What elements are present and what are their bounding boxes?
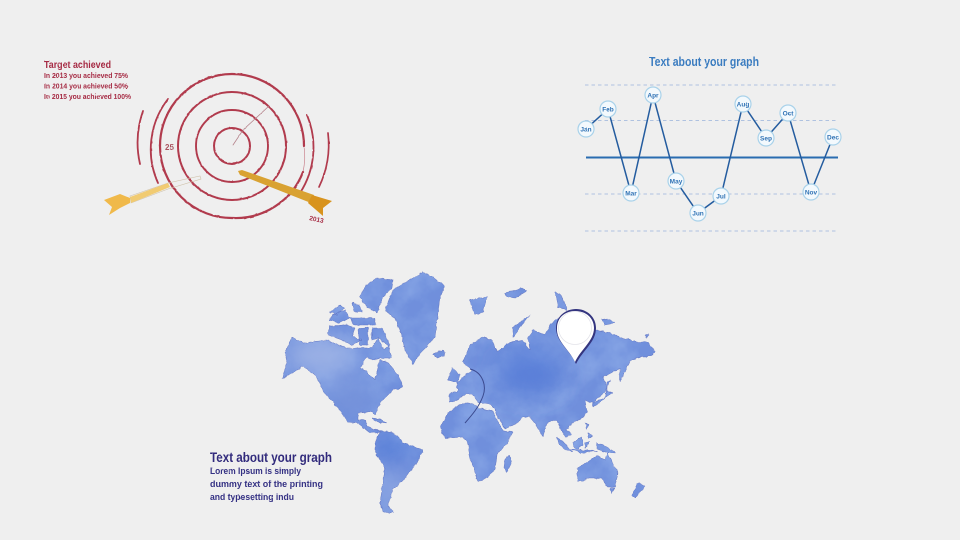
text block: yearly results: In 2015 you achieved 100% — [44, 92, 131, 101]
panel: world map — [210, 260, 670, 520]
text block: map description: Lorem Ipsum is simply — [210, 466, 302, 477]
chart: month labels: Jul — [716, 194, 726, 200]
heading: target achieved: Target achieved — [44, 59, 111, 71]
chart: target rings — [138, 74, 329, 218]
chart: month labels: Mar — [625, 190, 637, 198]
text block: map description: and typesetting indu — [210, 492, 294, 503]
chart: month labels: Oct — [783, 110, 794, 118]
chart: month labels: Aug — [737, 102, 749, 108]
panel: line chart — [578, 54, 841, 231]
text block: map description: dummy text of the printing — [210, 479, 323, 490]
map: route arc — [465, 369, 484, 423]
text block: map description — [210, 466, 323, 503]
chart: month labels: Jun — [692, 210, 704, 218]
chart: grid and average lines — [585, 85, 838, 231]
chart: month labels: May — [670, 178, 683, 186]
chart: month markers — [578, 87, 841, 221]
arrow: right — [238, 170, 332, 216]
chart: month labels: Sep — [760, 136, 772, 142]
heading: graph title: Text about your graph — [649, 54, 759, 69]
chart: month labels: Dec — [827, 134, 839, 142]
icon: location pin — [556, 309, 596, 364]
chart: month labels: Feb — [602, 106, 614, 114]
label: 25: 25 — [165, 143, 174, 152]
heading: map title: Text about your graph — [210, 449, 332, 465]
map: continents — [282, 271, 656, 514]
arrow: left — [104, 176, 201, 215]
chart: month labels: Jan — [580, 126, 592, 134]
chart: month labels: Apr — [647, 92, 659, 100]
chart: monthly line — [586, 95, 833, 213]
chart: month labels — [580, 92, 839, 218]
label: 2013: 2013 — [309, 215, 325, 225]
panel: target achieved — [44, 59, 332, 225]
text block: yearly results — [44, 71, 131, 101]
chart: month labels: Nov — [805, 190, 818, 196]
text block: yearly results: In 2013 you achieved 75% — [44, 71, 128, 80]
text block: yearly results: In 2014 you achieved 50% — [44, 82, 128, 90]
